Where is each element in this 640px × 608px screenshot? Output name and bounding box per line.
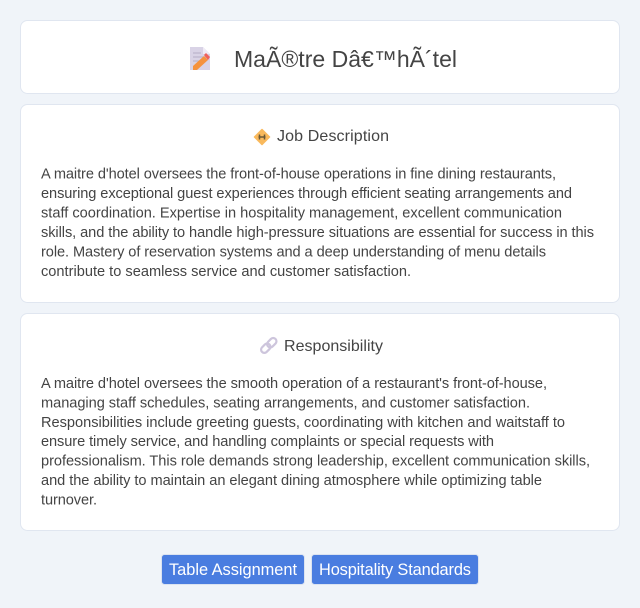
panel: job description xyxy=(20,104,620,302)
button: hospitality standards xyxy=(312,554,478,584)
panel: title card xyxy=(20,20,620,94)
text block: job description body: staff coordination. Expertise in hospitality management, excellent communication xyxy=(41,206,562,222)
text block: responsibility body: and the ability to maintain an elegant dining atmosphere while optimizing table xyxy=(41,473,542,489)
button: hospitality standards: Hospitality Standards xyxy=(319,561,471,579)
text block: responsibility body: A maitre d'hotel oversees the smooth operation of a restaurant's front-of-house, xyxy=(41,376,547,392)
icon: chain link xyxy=(260,337,278,354)
text block: responsibility body: professionalism. This role demands strong leadership, excellent communication skills, xyxy=(41,454,590,470)
button: table assignment xyxy=(162,554,304,584)
text block: job description body: A maitre d'hotel oversees the front-of-house operations in fine dining restaurants, xyxy=(41,166,556,182)
text block: job description body xyxy=(41,166,594,280)
text block: job description body: role. Mastery of reservation systems and a deep understanding of menu details xyxy=(41,244,546,260)
text block: responsibility body: ensure timely service, and handling complaints or special requests with xyxy=(41,434,494,450)
text block: responsibility body xyxy=(41,376,590,508)
text block: responsibility body: Responsibilities include greeting guests, coordinating with kitchen and waitstaff to xyxy=(41,415,565,431)
panel: responsibility xyxy=(20,314,620,530)
text block: responsibility body: turnover. xyxy=(41,492,97,508)
heading: job description: Job Description xyxy=(277,128,389,145)
text block: responsibility body: managing staff schedules, seating arrangements, and customer satisfaction. xyxy=(41,396,530,412)
button: table assignment: Table Assignment xyxy=(169,561,297,579)
text block: job description body: ensuring exceptional guest experiences through efficient seating arrangements and xyxy=(41,186,572,202)
icon: document with pencil xyxy=(190,47,210,70)
icon: road sign diamond xyxy=(254,130,270,144)
title: MaÃ®tre Dâ€™hÃ´tel xyxy=(234,46,457,72)
text block: job description body: skills, and the ability to handle high-pressure situations are essential for success in this xyxy=(41,225,594,241)
heading: responsibility: Responsibility xyxy=(284,338,383,355)
text block: job description body: contribute to seamless service and customer satisfaction. xyxy=(41,264,411,280)
